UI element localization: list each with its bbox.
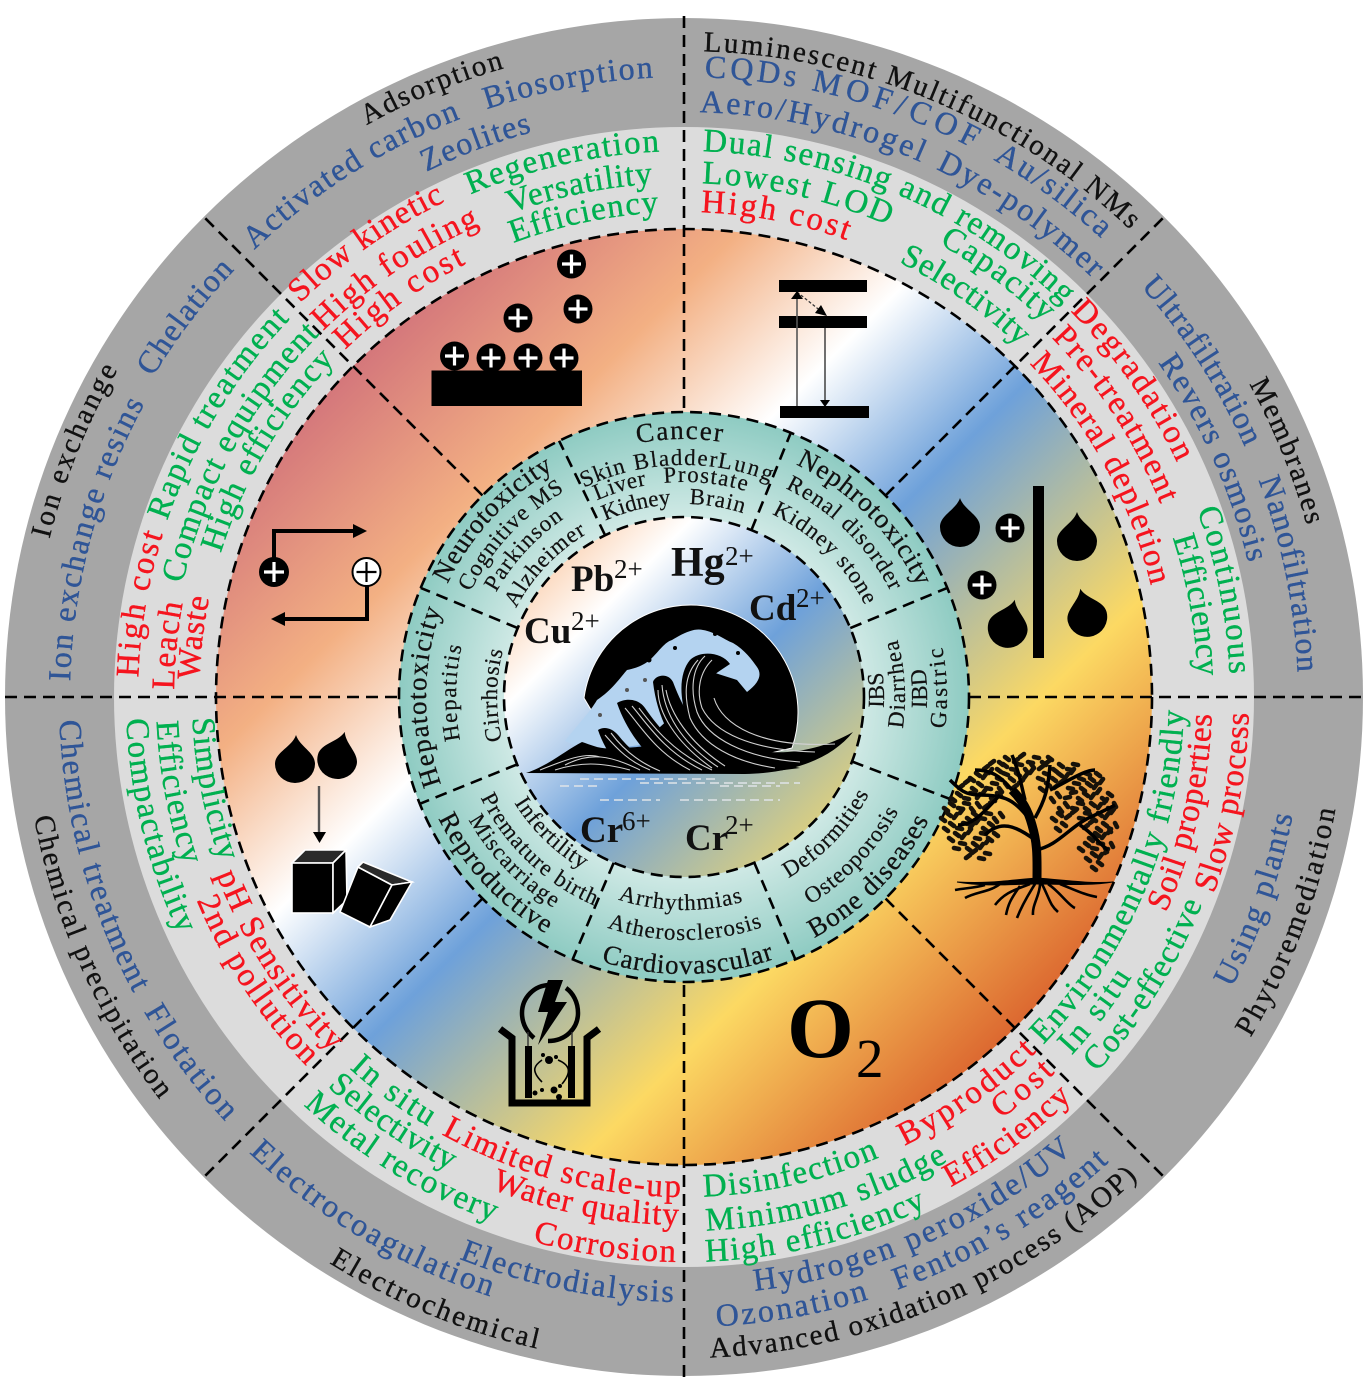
ion: Cu2+: 2+ [571, 606, 600, 636]
ion: Pb2+: Pb [571, 559, 614, 600]
health effects: gastrointestinal [868, 640, 948, 728]
method: Nanofiltration: Nanofiltration [1258, 474, 1316, 672]
pro: Continuous: Continuous [1200, 506, 1245, 673]
ion: Hg2+: 2+ [725, 541, 754, 571]
pro: Compact equipment: Compact equipment [137, 305, 330, 594]
item: Parkinson: Parkinson [474, 498, 570, 599]
ion: Pb2+ [571, 554, 643, 600]
con: Efficiency: Efficiency [940, 1086, 1069, 1187]
method: CQDs: CQDs [706, 56, 796, 86]
heading: Ion exchange: Ion exchange [19, 355, 125, 545]
item: Brain: Brain [686, 482, 750, 519]
con: Slow process: Slow process [1195, 714, 1249, 892]
pro: Disinfection: Disinfection [702, 1144, 879, 1197]
item: Kidney stone: Kidney stone [764, 488, 891, 613]
heading: Membranes: Membranes [1250, 376, 1319, 524]
health effects: cardiovascular [604, 886, 772, 974]
method: Hydrogen peroxide/UV: Hydrogen peroxide/UV [752, 1134, 1066, 1294]
teal ring: health effects [399, 412, 969, 982]
ion: Cd2+: 2+ [796, 583, 825, 613]
item: Lung: Lung [714, 446, 778, 487]
pro: Environmentally friendly: Environmentally friendly [1028, 710, 1191, 1044]
ion: Cr6+: 6+ [622, 806, 651, 836]
con: Waste: Waste [169, 592, 217, 682]
method: MOF/COF: MOF/COF [812, 70, 982, 146]
gradient disc: mechanism icons [216, 229, 1152, 1165]
icon: ion exchange arrows [259, 524, 380, 626]
con: Cost: Cost [992, 1062, 1055, 1115]
item: Diarrhea: Diarrhea [878, 638, 912, 731]
pro: High efficiency: High efficiency [705, 1193, 921, 1266]
pro: Metal recovery: Metal recovery [292, 1081, 509, 1239]
heading: Advanced oxidation process (AOP): Advanced oxidation process (AOP) [710, 1168, 1137, 1358]
pro: In situ: In situ [1056, 970, 1132, 1055]
ion: Cr6+ [580, 806, 651, 851]
core disc: heavy metal ions [504, 517, 864, 877]
method: Ozonation: Ozonation [716, 1286, 868, 1326]
panel: adsorption [246, 56, 660, 350]
con: pH Sensitivity: pH Sensitivity [199, 858, 356, 1064]
icon: O2 molecule: O [787, 980, 854, 1076]
item: Hepatitis: Hepatitis [435, 642, 467, 744]
pro: In situ: In situ [343, 1046, 445, 1135]
pro: Selectivity: Selectivity [319, 1063, 467, 1182]
health effects: bone diseases [780, 790, 928, 938]
heading: Hepatotoxicity: Hepatotoxicity [402, 602, 447, 792]
method: Zeolites: Zeolites [413, 102, 537, 179]
con: High cost: High cost [323, 234, 474, 358]
method: Ultrafiltration: Ultrafiltration [1145, 273, 1257, 447]
ion: Hg2+: Hg [671, 540, 725, 586]
item: Atherosclerosis: Atherosclerosis [606, 908, 764, 945]
item: Deformities: Deformities [774, 780, 880, 888]
heading: Phytoremediation: Phytoremediation [1234, 809, 1336, 1037]
con: Slow kinetic: Slow kinetic [277, 170, 453, 312]
ion: Cr2+: Cr [685, 818, 728, 859]
icon: tsunami wave [526, 605, 853, 800]
panel: membranes [1030, 273, 1319, 676]
item: Liver: Liver [589, 464, 650, 506]
con: High fouling: High fouling [299, 192, 488, 340]
item: Kidney: Kidney [597, 481, 675, 526]
pro: Efficiency: Efficiency [1172, 532, 1213, 676]
pro: Lowest LOD: Lowest LOD [702, 162, 892, 222]
pro: Dual sensing and removing: Dual sensing and removing [704, 129, 1074, 307]
panel: phytoremediation [1028, 710, 1336, 1068]
pro: Compactability: Compactability [108, 711, 206, 941]
icon: adsorption surface with cations [432, 250, 592, 406]
pro: Efficiency: Efficiency [143, 715, 211, 869]
con: Corrosion: Corrosion [530, 1214, 680, 1275]
item: Alzheimer: Alzheimer [493, 511, 594, 615]
heading: Cancer: Cancer [634, 414, 725, 449]
pro: Rapid treatment: Rapid treatment [129, 293, 300, 530]
ion: Hg2+ [671, 540, 754, 586]
panel: luminescent multifunctional nanomaterials [700, 32, 1138, 344]
health effects: cancer [580, 424, 774, 520]
item: Premature birth: Premature birth [466, 783, 609, 921]
item: Infertility: Infertility [506, 788, 597, 878]
ion: Cd2+: Cd [749, 588, 797, 629]
con: High cost: High cost [105, 525, 171, 682]
panel: advanced oxidation process [702, 1041, 1137, 1358]
pro: Efficiency: Efficiency [503, 179, 664, 252]
method: Revers osmosis: Revers osmosis [1158, 351, 1264, 561]
ion: Pb2+: 2+ [614, 554, 643, 584]
method: Chemical treatment: Chemical treatment [37, 711, 161, 1001]
con: High cost: High cost [702, 190, 852, 240]
middle ring: advantages and drawbacks [114, 127, 1254, 1267]
pro: Regeneration: Regeneration [458, 115, 666, 203]
pro: High efficiency: High efficiency [182, 334, 345, 562]
method: Ion exchange resins: Ion exchange resins [24, 386, 153, 689]
panel: ion exchange [31, 262, 332, 689]
heading: Neurotoxicity: Neurotoxicity [417, 440, 562, 593]
panel: electrochemical [250, 1052, 680, 1349]
heading: Cardiovascular: Cardiovascular [599, 936, 776, 981]
method: Activated carbon: Activated carbon [228, 81, 469, 259]
ion: Cr2+ [685, 810, 754, 859]
ion: Cr2+: 2+ [725, 810, 754, 840]
ion: Cr6+: Cr [580, 810, 623, 851]
icon: O2 molecule: 2 [856, 1028, 884, 1089]
con: Degradation: Degradation [1070, 296, 1189, 462]
heading: Adsorption: Adsorption [353, 40, 509, 133]
pro: Selectivity: Selectivity [901, 246, 1030, 344]
con: Water quality: Water quality [487, 1161, 686, 1242]
pro: Minimum sludge: Minimum sludge [705, 1150, 946, 1231]
item: IBS: IBS [863, 672, 890, 709]
icon: fluorescence energy levels [779, 280, 869, 418]
icon: precipitation drops and cubes [275, 727, 412, 927]
pro: Versatility: Versatility [501, 151, 658, 221]
item: Renal disorder: Renal disorder [778, 461, 918, 599]
method: Au/silica: Au/silica [993, 146, 1108, 238]
item: Arrhythmias: Arrhythmias [616, 880, 745, 916]
heading: Luminescent Multifunctional NMs: Luminescent Multifunctional NMs [704, 32, 1138, 228]
health effects: nephrotoxicity [772, 448, 929, 604]
icon: electrochemical cell [500, 980, 599, 1103]
con: Mineral depletion: Mineral depletion [1030, 349, 1165, 586]
method: Using plants: Using plants [1212, 814, 1292, 984]
health effects: hepatotoxicity [410, 606, 502, 789]
con: Soil properties: Soil properties [1148, 715, 1212, 911]
heading: Reproductive: Reproductive [424, 801, 564, 947]
icon: O2 molecule [787, 980, 884, 1089]
con: Limited scale-up: Limited scale-up [434, 1107, 689, 1220]
item: Skin: Skin [575, 452, 630, 493]
con: Byproduct: Byproduct [895, 1041, 1036, 1146]
pro: Simplicity: Simplicity [179, 712, 248, 866]
panel: chemical precipitation [35, 719, 343, 1122]
con: Leach: Leach [144, 598, 191, 692]
item: Gastric: Gastric [922, 646, 953, 730]
item: Miscarriage: Miscarriage [459, 806, 568, 918]
item: Cognitive MS: Cognitive MS [445, 467, 572, 599]
method: Flotation: Flotation [135, 994, 249, 1128]
method: Aero/Hydrogel: Aero/Hydrogel [700, 91, 927, 162]
item: Osteoporosis: Osteoporosis [795, 797, 909, 915]
health effects: neurotoxicity [432, 459, 585, 608]
pro: Capacity: Capacity [944, 229, 1054, 320]
con: Pre-treatment: Pre-treatment [1052, 323, 1176, 504]
icon: membrane filtration [940, 486, 1111, 658]
item: Cirrhosis: Cirrhosis [477, 646, 508, 745]
method: Dye-polymer: Dye-polymer [936, 150, 1103, 276]
pro: Cost-effective: Cost-effective [1085, 900, 1202, 1068]
heading: Electrochemical: Electrochemical [330, 1247, 539, 1349]
method: Electrodialysis: Electrodialysis [460, 1239, 673, 1306]
method: Chelation: Chelation [125, 248, 242, 383]
ion: Cu2+ [524, 606, 600, 652]
item: Prostate: Prostate [660, 459, 752, 496]
heading: Nephrotoxicity: Nephrotoxicity [787, 432, 951, 597]
con: 2nd pollution: 2nd pollution [181, 884, 330, 1077]
item: Bladder: Bladder [631, 444, 720, 475]
heading: Chemical precipitation: Chemical precipitation [10, 806, 183, 1112]
icon: tree with roots [941, 754, 1117, 918]
item: IBD: IBD [905, 668, 933, 709]
health effects: reproductive [438, 791, 596, 932]
method: Electrocoagulation: Electrocoagulation [250, 1138, 492, 1296]
method: Fenton's reagent: Fenton’s reagent [890, 1151, 1109, 1290]
ion: Cd2+ [749, 583, 825, 629]
ion: Cu2+: Cu [524, 611, 571, 652]
method: Biosorption: Biosorption [477, 43, 658, 117]
heading: Bone diseases: Bone diseases [796, 803, 943, 952]
